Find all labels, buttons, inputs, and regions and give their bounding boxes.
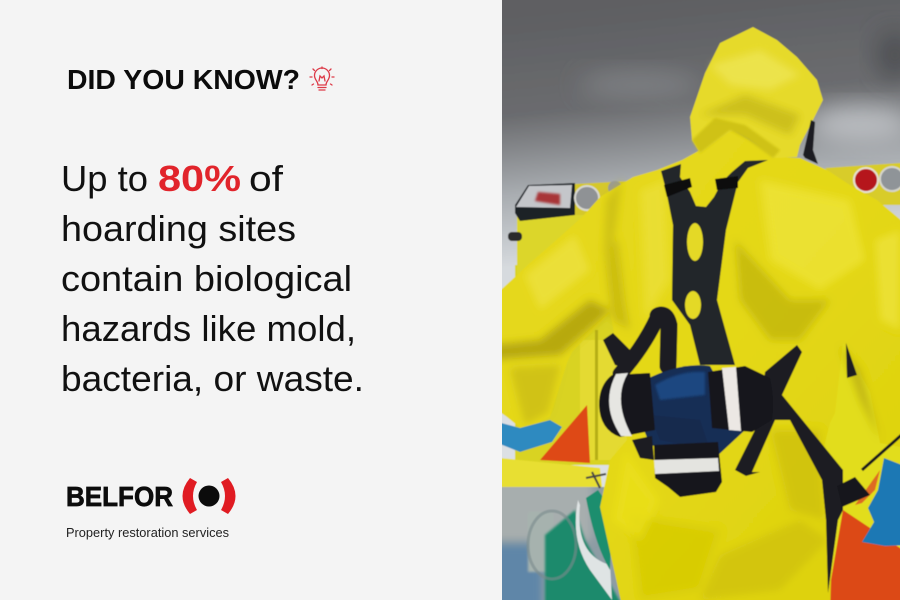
- bottom filter: [654, 442, 722, 497]
- icon: light bulb: [310, 67, 334, 90]
- ambulance: lower left bumper and glass: [502, 458, 622, 600]
- highlighted figure: 80%: 80%: [158, 158, 241, 199]
- harness cutout: [687, 223, 703, 261]
- side straps: [603, 333, 857, 593]
- line 3: contain biological: [61, 258, 352, 299]
- ambulance: rear left: [508, 181, 642, 465]
- hazmat suit body: [490, 130, 900, 600]
- logo wordmark: BELFOR: [66, 481, 173, 512]
- suit shadows: [490, 180, 880, 600]
- left glove: [502, 419, 562, 453]
- blue body: [640, 365, 745, 458]
- harness buckles: [664, 178, 692, 197]
- line 4: hazards like mold,: [61, 308, 356, 349]
- line 1 lead: Up to: [61, 158, 148, 199]
- main statistic text: [61, 158, 364, 399]
- back harness straps: [661, 160, 768, 365]
- orange chevron lower: [540, 405, 590, 463]
- window: [515, 183, 575, 221]
- respirator unit: [599, 365, 773, 497]
- breathing hose: [620, 315, 669, 374]
- suit highlights: [525, 180, 900, 540]
- left cartridge: [599, 373, 655, 437]
- handle: [508, 232, 522, 241]
- lamp: [575, 186, 599, 210]
- logo mark: dot in red brackets: [182, 478, 236, 514]
- orange chevron upper: [555, 223, 580, 243]
- logo tagline: Property restoration services: [66, 526, 229, 540]
- line 2: hoarding sites: [61, 208, 296, 249]
- line 1 end: of: [249, 158, 284, 199]
- right glove: [862, 458, 900, 546]
- left panel background: [0, 0, 502, 600]
- line 5: bacteria, or waste.: [61, 358, 364, 399]
- photo: hazmat worker: [480, 0, 900, 600]
- orange chevron right: [825, 510, 900, 600]
- right cartridge: [708, 366, 773, 432]
- hazmat hood: [690, 27, 823, 164]
- ambulance: right side: [823, 162, 900, 600]
- radio with antenna: [842, 434, 900, 507]
- sky: [502, 0, 900, 488]
- tail lights: [854, 168, 878, 192]
- heading: did you know: DID YOU KNOW?: [67, 64, 300, 95]
- logo: Belfor: [66, 478, 236, 514]
